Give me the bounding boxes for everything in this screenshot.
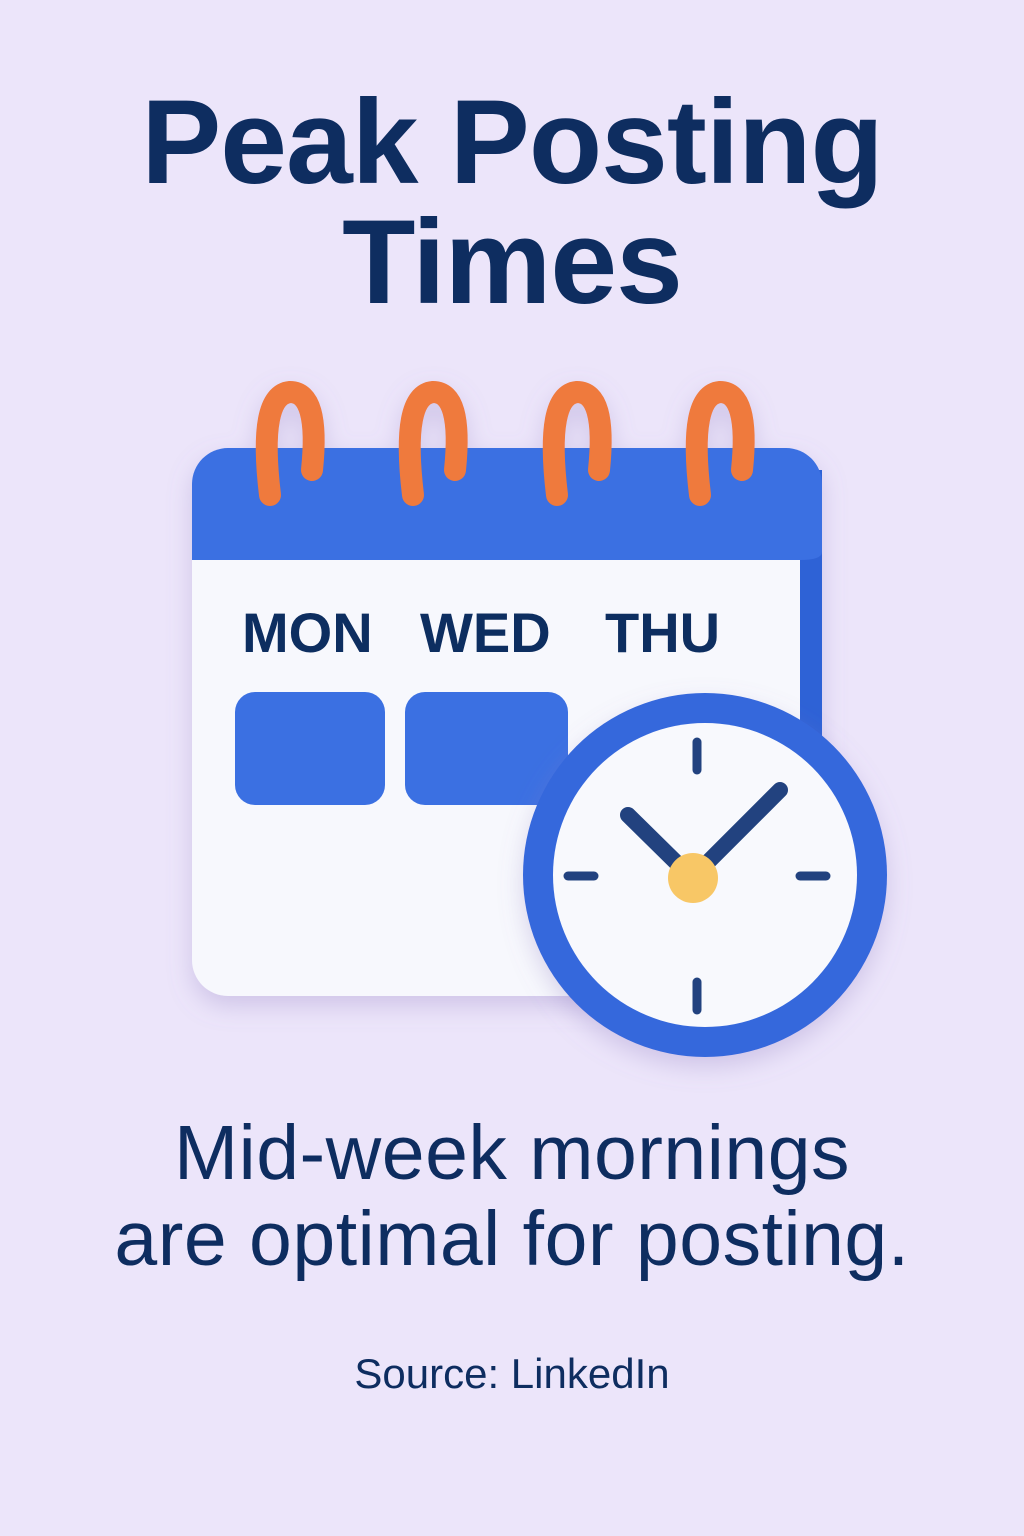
day labels: THU [605, 601, 720, 664]
day labels: MON [242, 601, 373, 664]
subtitle [114, 1110, 910, 1282]
rings [267, 392, 744, 495]
source: Source: LinkedIn [354, 1350, 670, 1397]
title [141, 75, 883, 329]
day labels: WED [420, 601, 551, 664]
title: Peak Posting [141, 75, 883, 209]
title: Times [342, 195, 682, 329]
subtitle: Mid-week mornings [174, 1110, 850, 1196]
clock [523, 693, 887, 1057]
calendar [192, 392, 822, 996]
day labels [242, 601, 720, 664]
subtitle: are optimal for posting. [114, 1196, 910, 1282]
blocks [235, 692, 385, 805]
